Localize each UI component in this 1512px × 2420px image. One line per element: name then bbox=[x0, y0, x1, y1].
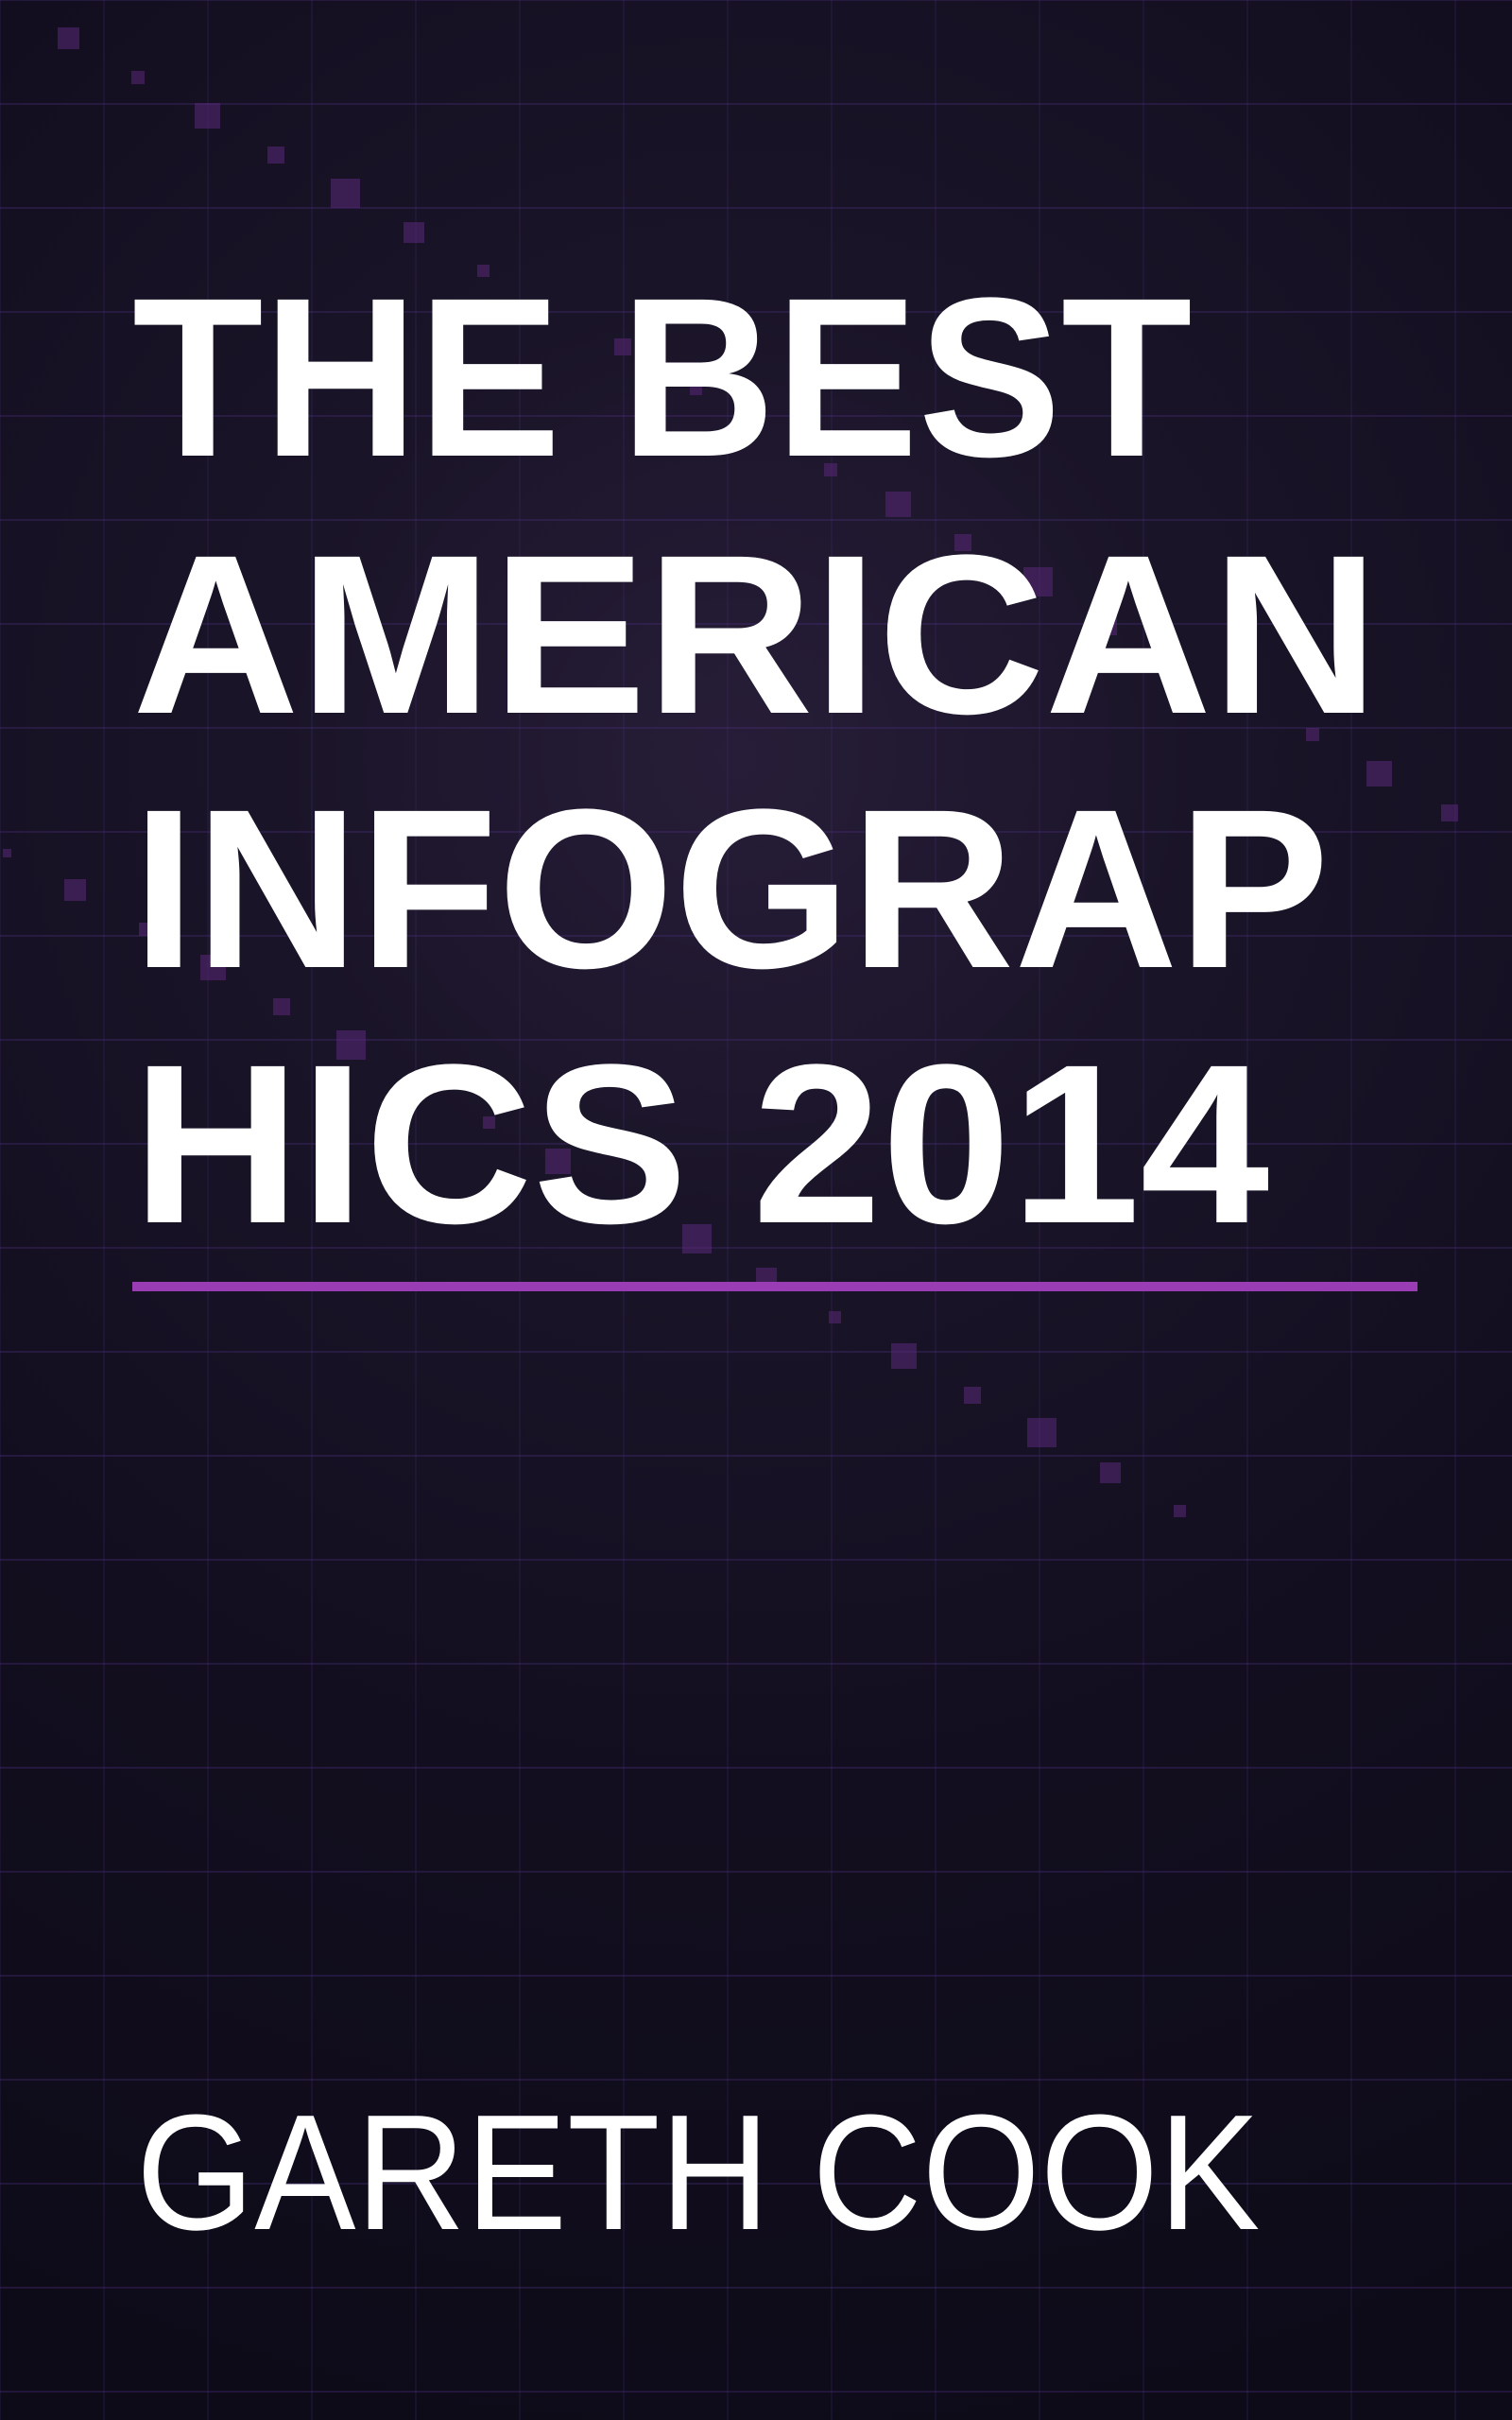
author name: GARETH COOK bbox=[136, 2080, 1260, 2264]
title: AMERICAN bbox=[132, 508, 1379, 761]
title: INFOGRAP bbox=[132, 762, 1330, 1015]
title: HICS 2014 bbox=[132, 1017, 1269, 1270]
title bbox=[132, 251, 1379, 1270]
underline accent bbox=[132, 1282, 1418, 1291]
title: THE BEST bbox=[132, 251, 1192, 504]
decorative squares bbox=[3, 27, 1458, 1517]
